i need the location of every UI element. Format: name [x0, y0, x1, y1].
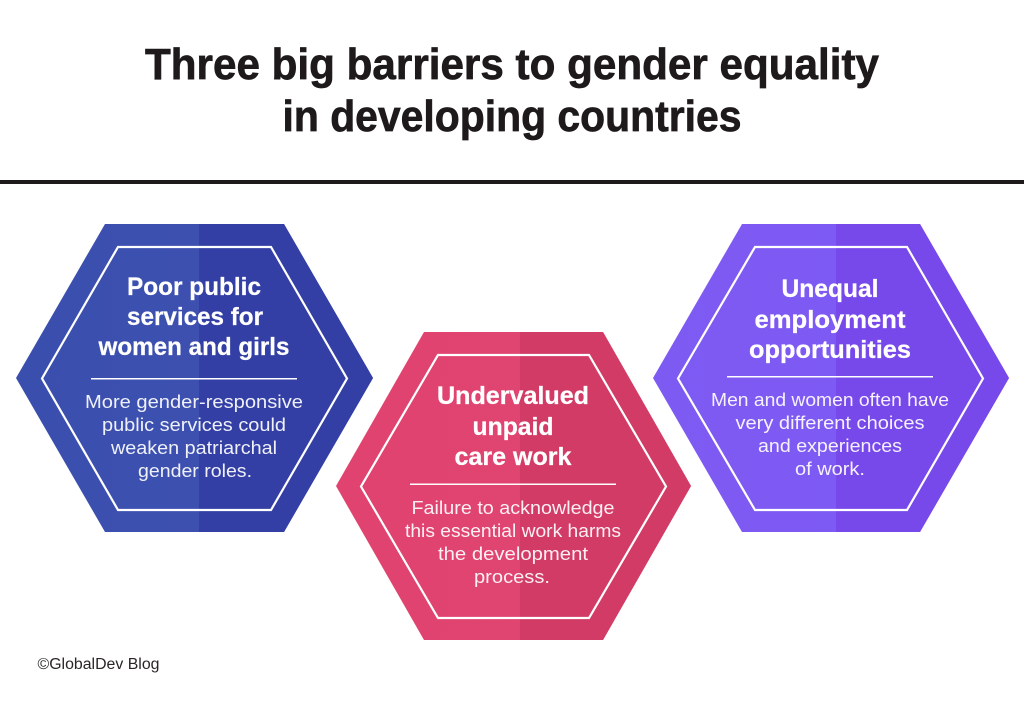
body text: poor public services [85, 391, 303, 481]
body text: poor public services: weaken patriarchal [110, 437, 277, 458]
body text: undervalued unpaid care work: process. [474, 566, 550, 587]
body text: undervalued unpaid care work: Failure to acknowledge [412, 497, 614, 518]
body text: unequal employment opportunities: and experiences [758, 435, 902, 456]
heading: poor public services: Poor public [127, 273, 261, 301]
panel: undervalued unpaid care work [336, 332, 691, 640]
panel: unequal employment opportunities [653, 224, 1009, 532]
heading: undervalued unpaid care work [437, 382, 589, 471]
body text: undervalued unpaid care work: the development [438, 543, 588, 564]
body text: poor public services: public services could [102, 414, 286, 435]
panel: poor public services [16, 224, 373, 532]
body text: poor public services: More gender-responsive [85, 391, 303, 412]
body text: unequal employment opportunities: very different choices [736, 412, 924, 433]
heading: poor public services [98, 273, 289, 361]
body text: unequal employment opportunities: of work. [795, 458, 865, 479]
credit: ©GlobalDev Blog [38, 656, 160, 673]
heading: undervalued unpaid care work: unpaid [472, 413, 554, 441]
body text: undervalued unpaid care work [405, 497, 621, 587]
body text: unequal employment opportunities: Men and women often have [711, 389, 949, 410]
heading: unequal employment opportunities: employment [754, 306, 906, 334]
heading: poor public services: women and girls [98, 333, 289, 361]
title [145, 40, 880, 141]
body text: undervalued unpaid care work: this essential work harms [405, 520, 621, 541]
heading: undervalued unpaid care work: Undervalued [437, 382, 589, 410]
heading: unequal employment opportunities: opportunities [749, 336, 911, 364]
heading: unequal employment opportunities [749, 275, 911, 364]
title: Three big barriers to gender equality [145, 40, 880, 89]
heading: undervalued unpaid care work: care work [454, 443, 572, 471]
heading: unequal employment opportunities: Unequal [782, 275, 878, 303]
heading: poor public services: services for [127, 303, 263, 331]
body text: unequal employment opportunities [711, 389, 949, 479]
header divider [0, 180, 1024, 184]
title: in developing countries [282, 92, 742, 141]
body text: poor public services: gender roles. [138, 460, 252, 481]
